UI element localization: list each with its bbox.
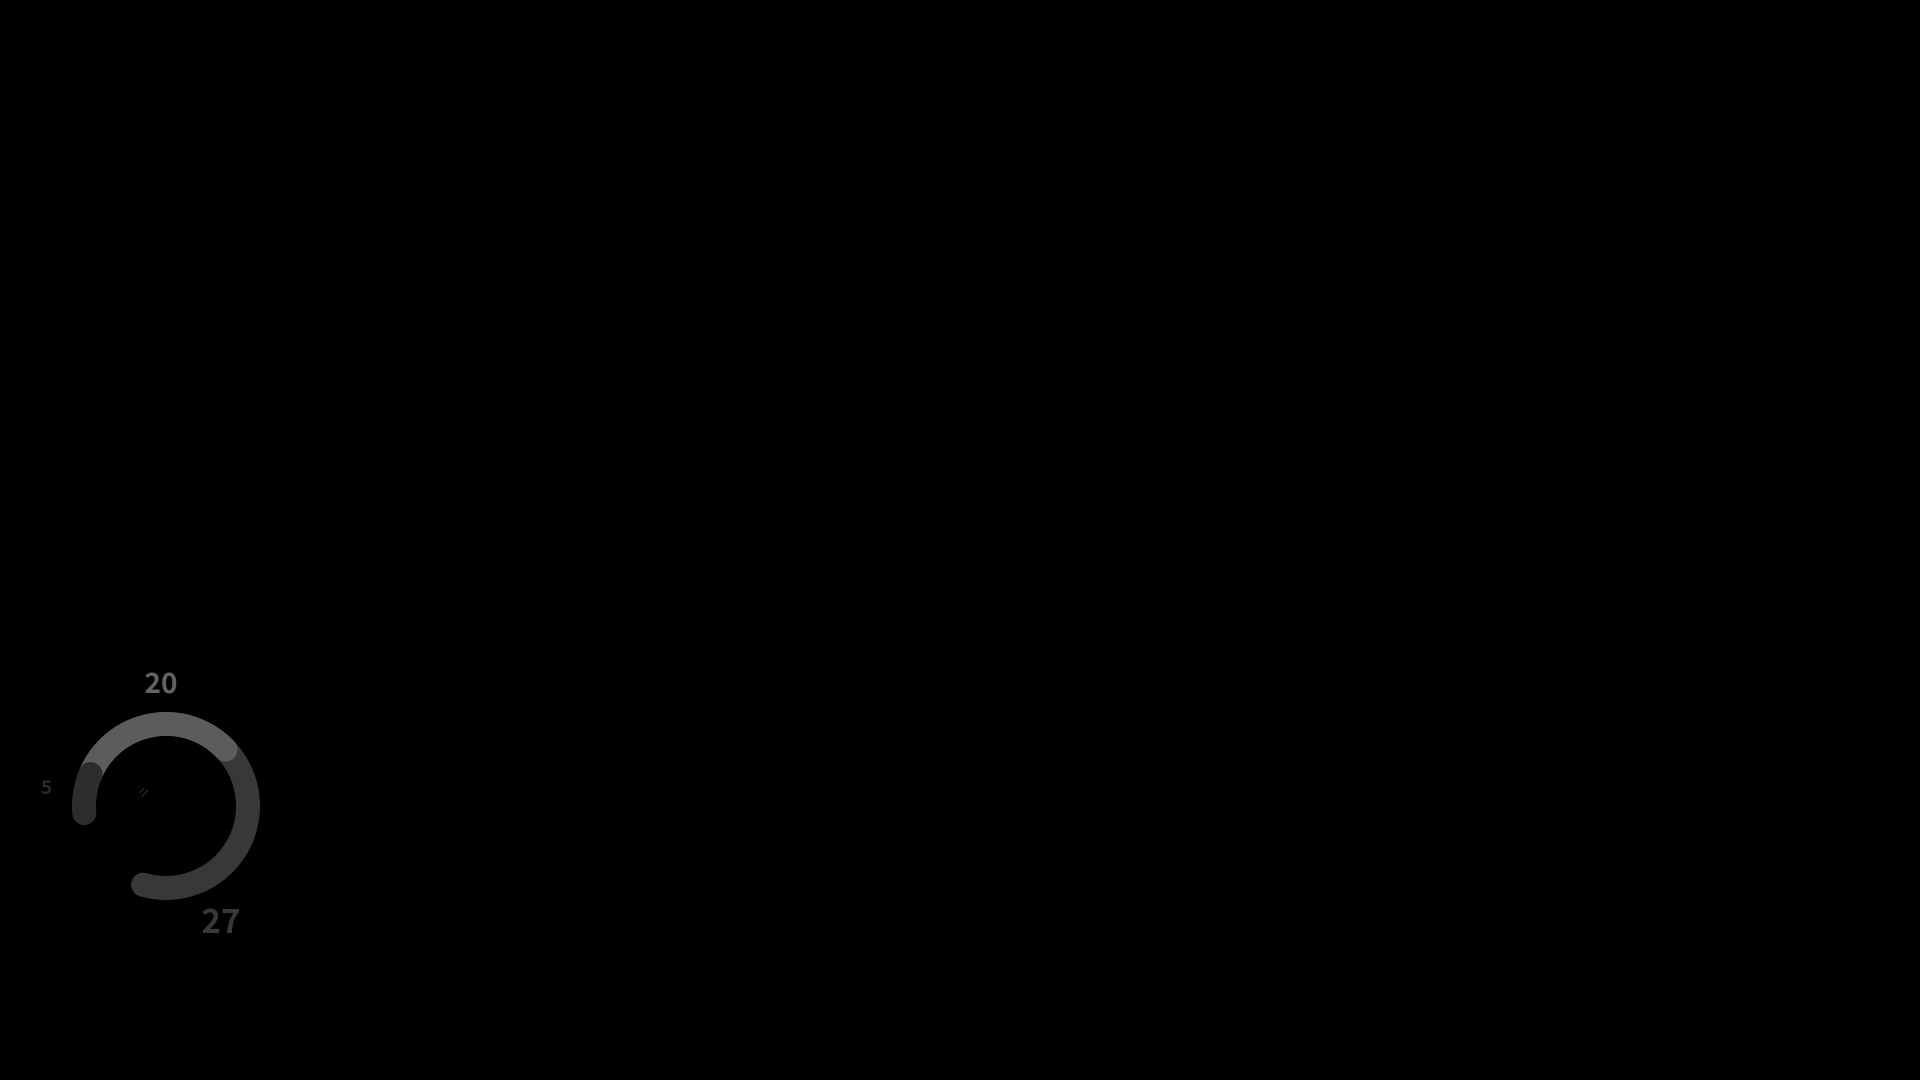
label: 20: 20 xyxy=(144,662,178,702)
label: 27: 27 xyxy=(202,895,240,943)
donut chart xyxy=(84,724,248,888)
segment: value 27 xyxy=(143,748,248,888)
label: 5: 5 xyxy=(41,773,52,800)
icon: small hatch mark xyxy=(140,788,148,797)
segment: value 5 xyxy=(84,774,90,813)
segment: value 20 xyxy=(90,724,226,774)
